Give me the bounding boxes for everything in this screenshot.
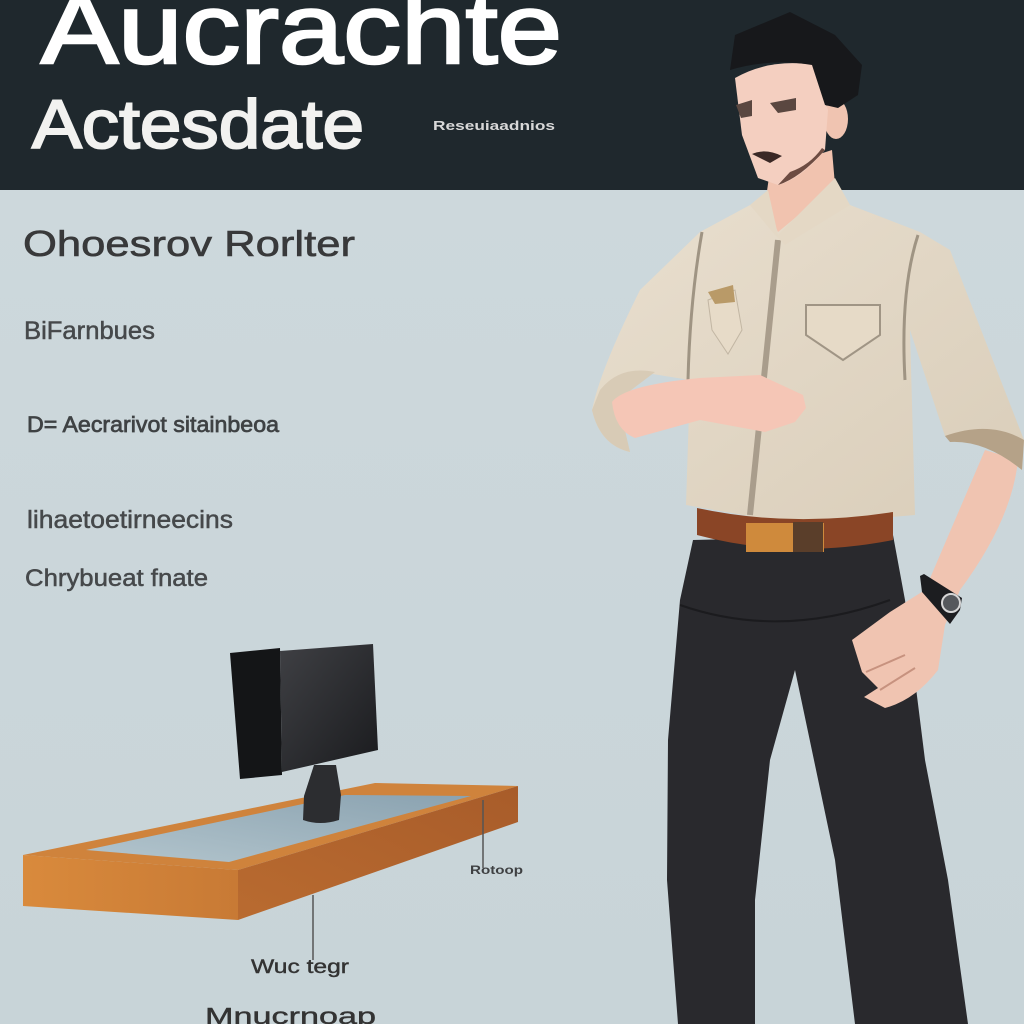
right sleeve cuff — [945, 429, 1024, 470]
illustration: desk with monitor — [23, 644, 518, 920]
eyes — [736, 98, 796, 118]
desk callout line bottom — [312, 895, 314, 960]
list item 4: Chrybueat fnate — [25, 565, 208, 592]
monitor screen — [280, 644, 378, 772]
hair — [730, 12, 862, 108]
belt clasp — [793, 522, 823, 552]
illustration: man — [592, 12, 1024, 1024]
left chest patch — [708, 290, 742, 354]
right sleeve seam — [904, 235, 918, 380]
trouser hip shadow — [680, 600, 890, 621]
section heading: Ohoesrov Rorlter — [23, 223, 355, 264]
mouth — [752, 151, 782, 163]
chest badge — [708, 285, 735, 304]
watch — [920, 574, 962, 624]
belt — [697, 508, 893, 549]
desk side face — [238, 786, 518, 920]
hand finger lines — [866, 655, 915, 690]
desk label right: Rotoop — [470, 863, 523, 877]
header small label: Reseuiaadnios — [433, 118, 555, 133]
collar — [750, 178, 850, 245]
desk front face — [23, 855, 238, 920]
watch face — [942, 594, 960, 612]
desk top — [23, 783, 518, 870]
belt buckle — [746, 523, 824, 552]
left sleeve cuff — [592, 370, 655, 452]
face — [735, 63, 828, 185]
rear arm skin — [852, 450, 1018, 708]
shirt placket — [750, 240, 778, 515]
list item 2: D= Aecrarivot sitainbeoa — [27, 412, 280, 437]
desk label bottom: Wuc tegr — [251, 957, 350, 978]
forearm skin — [612, 375, 806, 438]
beard shadow — [778, 148, 825, 185]
subtitle: Actesdate — [32, 86, 364, 163]
trousers — [667, 535, 968, 1024]
shirt body — [592, 200, 1024, 525]
ear — [824, 99, 848, 139]
desk callout line right — [482, 800, 484, 868]
list item 3: lihaetoetirneecins — [27, 506, 233, 534]
header band — [0, 0, 1024, 190]
monitor stand — [303, 765, 341, 823]
desk glass — [86, 795, 471, 862]
left sleeve seam — [688, 232, 702, 380]
monitor back edge — [230, 648, 282, 779]
shirt pocket — [806, 305, 880, 360]
neck — [765, 150, 835, 232]
list item 1: BiFarnbues — [24, 317, 155, 345]
